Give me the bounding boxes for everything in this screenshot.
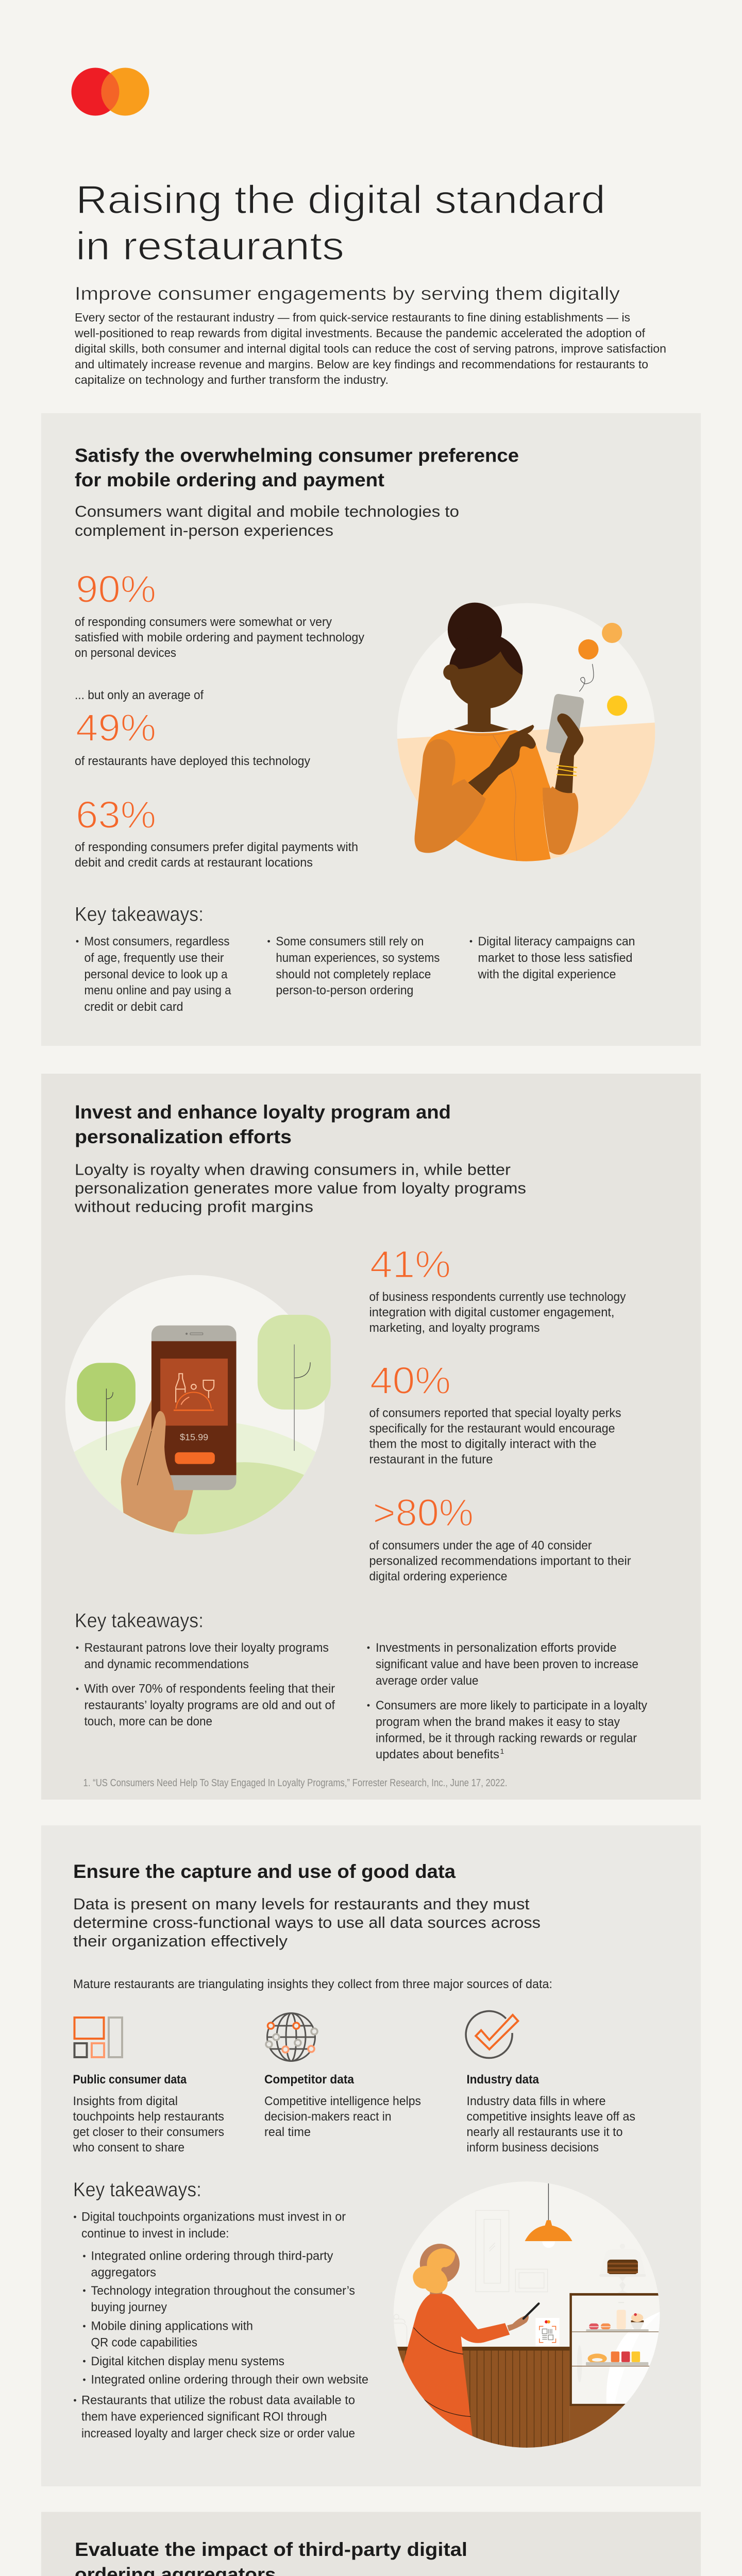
- intro paragraph: capitalize on technology and further transform the industry.: [75, 373, 389, 386]
- takeaway column 1: and dynamic recommendations: [85, 1657, 249, 1671]
- subheading: Loyalty is royalty when drawing consumers in, while better: [75, 1160, 511, 1179]
- takeaway column 3: market to those less satisfied: [478, 951, 633, 965]
- takeaway column 2: 1: [500, 1747, 504, 1755]
- heading: for mobile ordering and payment: [75, 469, 384, 490]
- heading: Ensure the capture and use of good data: [73, 1861, 456, 1882]
- sub-bullets: Integrated online ordering through third-party: [91, 2249, 333, 2263]
- key takeaways: Key takeaways:: [73, 2179, 201, 2201]
- stat: 41%: [369, 1243, 626, 1335]
- takeaway column 3: Digital literacy campaigns can: [478, 935, 635, 948]
- stat: 40%: 40%: [370, 1359, 451, 1402]
- data source: public consumer data: who consent to share: [73, 2141, 184, 2155]
- key takeaways: Key takeaways:: [75, 1609, 204, 1632]
- stat: 63%: of responding consumers prefer digital payments with: [75, 840, 358, 854]
- takeaway column 1: restaurants’ loyalty programs are old and out of: [85, 1698, 335, 1713]
- key takeaways: Digital touchpoints organizations must invest in or: [81, 2210, 346, 2224]
- takeaway column 1: touch, more can be done: [85, 1715, 212, 1728]
- intro paragraph: and ultimately increase revenue and margins. Below are key findings and recommendations for restaurants to: [75, 358, 648, 371]
- sub-bullets: aggregators: [91, 2266, 156, 2279]
- intro line: Mature restaurants are triangulating insights they collect from three major sources of data:: [73, 1977, 552, 1991]
- stat: 63%: [75, 793, 358, 870]
- subheading: [74, 1160, 526, 1216]
- data source: competitor data: Competitive intelligence helps: [264, 2094, 421, 2108]
- stat: 41%: of business respondents currently use technology: [369, 1290, 626, 1304]
- key takeaways: continue to invest in include:: [81, 2227, 229, 2241]
- stat: 40%: specifically for the restaurant would encourage: [369, 1422, 615, 1435]
- data source: public consumer data: [73, 2018, 224, 2155]
- data source: industry data: [466, 2011, 635, 2155]
- data source: industry data: Industry data: [467, 2073, 539, 2087]
- stat: 40%: restaurant in the future: [369, 1453, 493, 1466]
- takeaway column 1: credit or debit card: [85, 1000, 183, 1014]
- stat: 41%: marketing, and loyalty programs: [369, 1321, 540, 1335]
- intro paragraph: well-positioned to reap rewards from digital investments. Because the pandemic accelerated the adoption of: [74, 327, 646, 340]
- data source: competitor data: [264, 2013, 421, 2139]
- icon: globe with nodes: [266, 2013, 317, 2061]
- takeaway column 3: [470, 935, 635, 981]
- title: in restaurants: [76, 224, 344, 268]
- panel: loyalty and personalization: [41, 1074, 701, 1800]
- data source: competitor data: real time: [264, 2125, 311, 2139]
- stat: >80%: [369, 1491, 631, 1584]
- takeaway column 2: significant value and have been proven to increase: [376, 1657, 638, 1671]
- intro paragraph: Every sector of the restaurant industry — from quick-service restaurants to fine dining establishments — is: [75, 311, 630, 324]
- key takeaways: increased loyalty and larger check size or order value: [81, 2427, 355, 2441]
- stat: >80%: personalized recommendations important to their: [369, 1554, 631, 1568]
- sub-bullets: Digital kitchen display menu systems: [91, 2354, 284, 2368]
- takeaway column 2: [267, 935, 440, 997]
- takeaway column 1: [76, 1641, 335, 1728]
- takeaway column 1: [76, 935, 231, 1014]
- heading: personalization efforts: [75, 1126, 292, 1147]
- subtitle: Improve consumer engagements by serving them digitally: [75, 283, 620, 304]
- takeaway column 2: updates about benefits: [376, 1748, 499, 1761]
- illustration: woman with phone: [394, 603, 658, 866]
- data source: competitor data: Competitor data: [264, 2073, 355, 2087]
- key takeaways: Key takeaways:: [75, 904, 204, 925]
- subheading: complement in-person experiences: [75, 521, 333, 539]
- logo: Mastercard circles: [71, 68, 149, 115]
- sub-bullets: Technology integration throughout the consumer’s: [91, 2284, 355, 2298]
- stat: 41%: 41%: [370, 1243, 451, 1286]
- key takeaways: [75, 1609, 647, 1761]
- stat: >80%: of consumers under the age of 40 consider: [369, 1538, 592, 1553]
- takeaway column 1: Most consumers, regardless: [85, 935, 230, 948]
- stat: 41%: integration with digital customer engagement,: [369, 1306, 614, 1319]
- illustration: woman ordering at counter: [394, 2181, 663, 2459]
- takeaway column 2: average order value: [376, 1674, 478, 1688]
- subheading: Data is present on many levels for restaurants and they must: [73, 1895, 530, 1913]
- intro paragraph: digital skills, both consumer and internal digital tools can reduce the cost of serving patrons, improve satisfaction: [75, 342, 666, 355]
- takeaway column 2: should not completely replace: [276, 968, 431, 981]
- stat: 40%: them the most to digitally interact with the: [369, 1437, 597, 1451]
- takeaway column 2: Consumers are more likely to participate in a loyalty: [376, 1699, 647, 1713]
- takeaway column 1: With over 70% of respondents feeling that their: [85, 1682, 335, 1696]
- stat: 49%: [75, 688, 310, 768]
- title: [76, 178, 605, 268]
- key takeaways: them have experienced significant ROI through: [81, 2410, 327, 2424]
- stat: 90%: [75, 568, 364, 660]
- heading: [75, 1101, 451, 1147]
- sub-bullets: Integrated online ordering through their own website: [91, 2373, 368, 2386]
- panel: mobile ordering and payment: [41, 413, 701, 1046]
- illustration: phone in hand with trees: $15.99: [180, 1432, 208, 1442]
- illustration: phone in hand with trees: [65, 1275, 331, 1546]
- stat: 40%: [369, 1359, 621, 1466]
- subheading: [75, 502, 459, 539]
- heading: Evaluate the impact of third-party digital: [75, 2539, 467, 2560]
- data source: industry data: inform business decisions: [467, 2141, 599, 2155]
- subheading: determine cross-functional ways to use all data sources across: [73, 1913, 541, 1931]
- stat: 63%: 63%: [76, 793, 156, 836]
- stat: 63%: debit and credit cards at restaurant locations: [75, 856, 313, 870]
- data source: competitor data: decision-makers react in: [264, 2110, 392, 2124]
- data source: industry data: nearly all restaurants use it to: [467, 2125, 622, 2139]
- heading: [75, 445, 519, 490]
- subheading: their organization effectively: [73, 1932, 288, 1950]
- stat: 40%: of consumers reported that special loyalty perks: [369, 1406, 621, 1420]
- intro paragraph: [74, 311, 666, 386]
- takeaway column 2: informed, be it through racking rewards or regular: [376, 1731, 637, 1745]
- subheading: Consumers want digital and mobile technologies to: [75, 502, 459, 520]
- data source: public consumer data: Insights from digital: [73, 2094, 178, 2108]
- stat: >80%: >80%: [373, 1491, 474, 1534]
- title: Raising the digital standard: [76, 178, 605, 222]
- stat: 90%: on personal devices: [75, 646, 176, 660]
- stat: 90%: 90%: [76, 568, 156, 611]
- takeaway column 2: program when the brand makes it easy to stay: [376, 1715, 620, 1729]
- key takeaways: [73, 2179, 368, 2441]
- key takeaways: [75, 904, 635, 1014]
- data source: public consumer data: touchpoints help restaurants: [73, 2110, 224, 2124]
- takeaway column 1: personal device to look up a: [85, 968, 228, 981]
- subheading: personalization generates more value from loyalty programs: [75, 1179, 526, 1197]
- takeaway column 2: Some consumers still rely on: [276, 935, 424, 948]
- takeaway column 2: Investments in personalization efforts provide: [376, 1641, 616, 1655]
- stat: 90%: of responding consumers were somewhat or very: [75, 615, 332, 629]
- panel: third-party aggregators: [41, 2512, 701, 2576]
- takeaway column 1: Restaurant patrons love their loyalty programs: [85, 1641, 329, 1655]
- sub-bullets: Mobile dining applications with: [91, 2319, 253, 2333]
- key takeaways: Restaurants that utilize the robust data available to: [81, 2394, 355, 2407]
- icon: check in circle: [466, 2011, 518, 2058]
- heading: Satisfy the overwhelming consumer preference: [75, 445, 519, 466]
- takeaway column 1: menu online and pay using a: [85, 984, 231, 997]
- stat: 49%: 49%: [76, 706, 156, 749]
- takeaway column 3: with the digital experience: [478, 968, 616, 981]
- panel: good data: [41, 1825, 701, 2486]
- sub-bullets: [83, 2249, 368, 2386]
- data source: public consumer data: get closer to their consumers: [73, 2125, 224, 2139]
- stat: 90%: satisfied with mobile ordering and payment technology: [75, 631, 364, 645]
- data source: industry data: competitive insights leave off as: [467, 2110, 635, 2124]
- takeaway column 2: human experiences, so systems: [276, 951, 440, 965]
- takeaway column 2: [367, 1641, 647, 1761]
- stat: 49%: of restaurants have deployed this technology: [75, 754, 310, 768]
- stat: 49%: ... but only an average of: [75, 688, 204, 702]
- data source: public consumer data: Public consumer data: [73, 2073, 187, 2087]
- sub-bullets: QR code capabilities: [91, 2336, 197, 2349]
- takeaway column 1: of age, frequently use their: [85, 951, 224, 965]
- footnote: 1. “US Consumers Need Help To Stay Engaged In Loyalty Programs,” Forrester Research, Inc., June 17, 2022.: [83, 1777, 507, 1789]
- stat: >80%: digital ordering experience: [369, 1569, 507, 1584]
- icon: layout blocks: [74, 2018, 122, 2057]
- heading: [75, 2539, 467, 2576]
- heading: Invest and enhance loyalty program and: [75, 1101, 451, 1123]
- data source: industry data: Industry data fills in where: [467, 2094, 606, 2108]
- subheading: [73, 1895, 541, 1950]
- subheading: without reducing profit margins: [74, 1197, 313, 1216]
- sub-bullets: buying journey: [91, 2300, 167, 2314]
- takeaway column 2: person-to-person ordering: [276, 984, 413, 997]
